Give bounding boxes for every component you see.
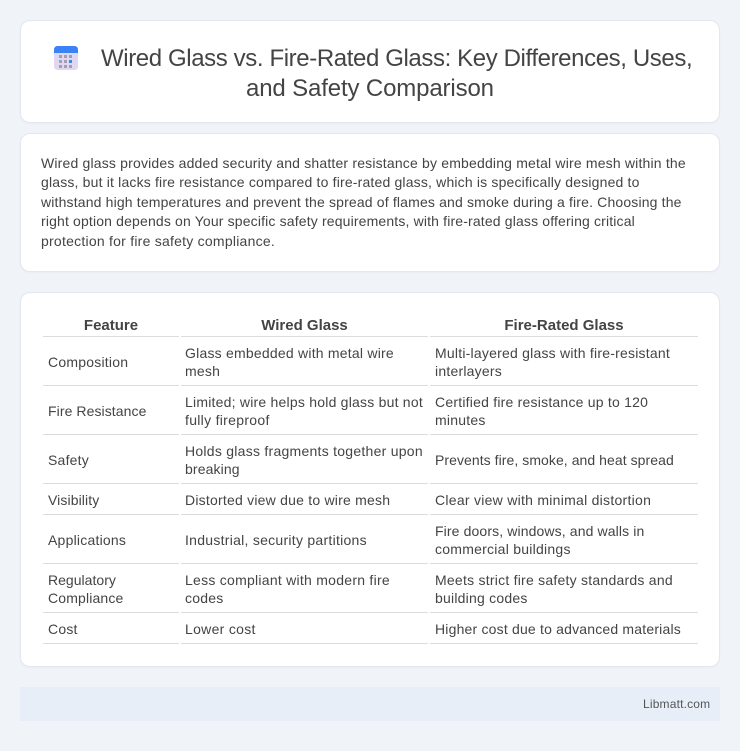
comparison table: fully fireproof — [185, 412, 270, 428]
comparison table — [43, 317, 698, 644]
comparison table: Clear view with minimal distortion — [435, 492, 651, 508]
comparison table: Lower cost — [185, 621, 256, 637]
comparison table: commercial buildings — [435, 541, 571, 557]
comparison table: Fire-Rated Glass — [504, 317, 624, 334]
comparison table: Prevents fire, smoke, and heat spread — [435, 452, 674, 468]
panel: comparison table — [20, 292, 720, 667]
title: Wired Glass vs. Fire-Rated Glass: Key Differences, Uses, — [101, 45, 692, 72]
intro paragraph: right option depends on Your specific safety requirements, with fire-rated glass offering critical — [41, 213, 635, 229]
intro paragraph: glass, but it lacks fire resistance compared to fire-rated glass, which is specifically designed to — [41, 174, 640, 190]
title second line: and Safety Comparison — [246, 75, 494, 102]
comparison table: Multi-layered glass with fire-resistant — [435, 345, 670, 361]
intro paragraph: withstand high temperatures and prevent the spread of flames and smoke during a fire. Choosing the — [41, 194, 682, 210]
comparison table: Regulatory — [48, 572, 116, 588]
panel: intro text — [20, 133, 720, 272]
comparison table: interlayers — [435, 363, 502, 379]
comparison table: Cost — [48, 621, 78, 637]
intro paragraph: Wired glass provides added security and shatter resistance by embedding metal wire mesh within the — [41, 155, 686, 171]
comparison table: Industrial, security partitions — [185, 532, 367, 548]
comparison table: Composition — [48, 354, 128, 370]
comparison table: Less compliant with modern fire — [185, 572, 390, 588]
comparison table: Feature — [84, 317, 138, 334]
comparison table: Visibility — [48, 492, 99, 508]
icon: calendar — [54, 46, 78, 70]
comparison table: Distorted view due to wire mesh — [185, 492, 390, 508]
comparison table: Safety — [48, 452, 89, 468]
comparison table: Glass embedded with metal wire — [185, 345, 394, 361]
comparison table: mesh — [185, 363, 220, 379]
comparison table: breaking — [185, 461, 240, 477]
comparison table: Higher cost due to advanced materials — [435, 621, 681, 637]
comparison table: Wired Glass — [261, 317, 348, 334]
panel: title card — [20, 20, 720, 123]
comparison table: Holds glass fragments together upon — [185, 443, 423, 459]
comparison table: Limited; wire helps hold glass but not — [185, 394, 423, 410]
intro paragraph — [41, 155, 686, 249]
comparison table: Certified fire resistance up to 120 — [435, 394, 648, 410]
footer source text: Libmatt.com — [643, 697, 710, 711]
comparison table: minutes — [435, 412, 486, 428]
comparison table: Compliance — [48, 590, 123, 606]
comparison table: building codes — [435, 590, 528, 606]
intro paragraph: protection for fire safety compliance. — [41, 233, 275, 249]
comparison table: Meets strict fire safety standards and — [435, 572, 673, 588]
comparison table: codes — [185, 590, 223, 606]
comparison table: Fire Resistance — [48, 403, 146, 419]
footer bar — [20, 687, 720, 721]
comparison table: Fire doors, windows, and walls in — [435, 523, 644, 539]
comparison table: Applications — [48, 532, 126, 548]
